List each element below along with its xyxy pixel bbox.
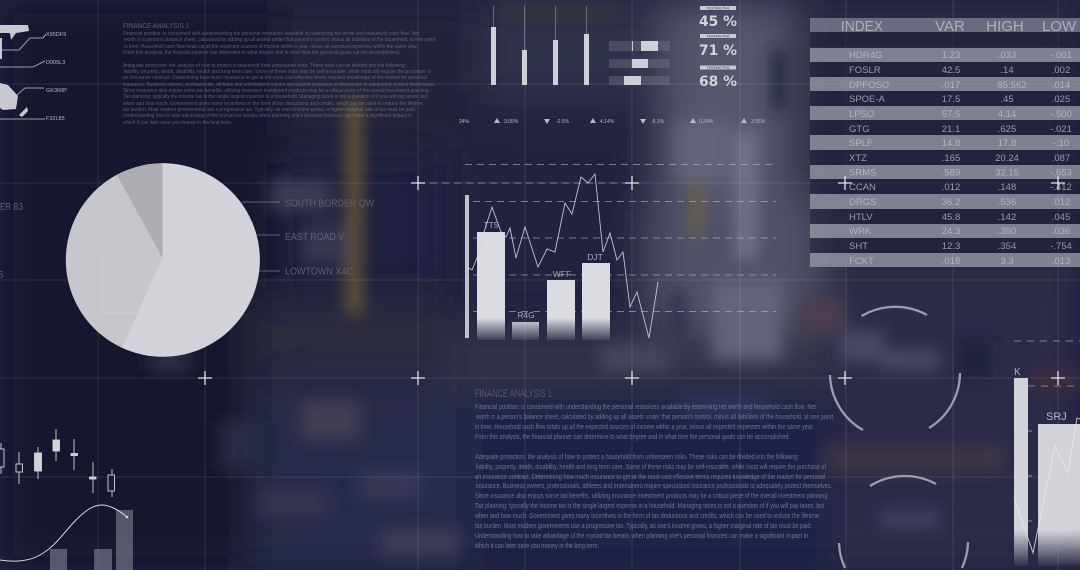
data table: -.10 bbox=[1053, 138, 1069, 149]
text block: finance analysis bottom: Financial position: is concerned with understanding the personal resources available by examining net worth and household cash flow. Net bbox=[475, 402, 817, 411]
percentage readouts: 45 % bbox=[699, 14, 737, 30]
text block: finance analysis bottom: in time. Household cash flow totals up all the expected sources of income within a year, minus all expected expenses within the same year. bbox=[475, 422, 814, 431]
pie legend: LOWTOWN X4C bbox=[285, 266, 353, 278]
data table: 45.8 bbox=[942, 212, 960, 223]
ticker row: -2.5% bbox=[556, 119, 570, 125]
data table: VAR bbox=[935, 18, 965, 35]
data table: .012 bbox=[942, 182, 960, 193]
text block: finance analysis top: liability, property, death, disability, health and long term care. Some of these risks may be self-insurable, while most will require the purchase of bbox=[124, 69, 432, 75]
text block: finance analysis bottom: From this analysis, the financial planner can determine to what degree and in what time the personal goals can be accomplished. bbox=[475, 432, 790, 441]
pie chart bbox=[66, 163, 260, 357]
data table: 1.23 bbox=[942, 50, 960, 61]
ticker row: 24% bbox=[459, 119, 470, 125]
text block: finance analysis top: Since insurance also enjoys some tax benefits, utilizing insurance investment products may be a critical piece of the overall investment planning. bbox=[123, 88, 430, 94]
right bar chart bbox=[1014, 341, 1080, 566]
text block: finance analysis bottom: Since insurance also enjoys some tax benefits, utilizing insurance investment products may be a critical piece of the overall investment planning. bbox=[475, 491, 829, 500]
data table: DRGS bbox=[849, 197, 876, 208]
pie legend: EAST ROAD V bbox=[285, 232, 344, 243]
pie legend bbox=[0, 198, 374, 281]
text block: finance analysis bottom: which it can later save you money in the long term. bbox=[474, 541, 599, 550]
right bar chart: K bbox=[1014, 367, 1021, 378]
text block: finance analysis top: tax burden. Most modern governments use a progressive tax. Typically, as one's income grows, a higher marginal rate of tax must be paid. bbox=[123, 107, 416, 113]
bar and line chart: WFF bbox=[553, 269, 571, 279]
ticker row: 3.05% bbox=[504, 119, 519, 125]
data table: 4.14 bbox=[998, 109, 1016, 120]
data table: -.500 bbox=[1050, 109, 1072, 120]
data table: WRK bbox=[849, 226, 872, 237]
right bar chart: SRJ bbox=[1046, 411, 1067, 423]
percentage readouts: 71 % bbox=[699, 43, 737, 59]
data table: .013 bbox=[1052, 256, 1070, 267]
data table: 57.5 bbox=[942, 109, 960, 120]
data table: 3.3 bbox=[1000, 256, 1014, 267]
data table: -.412 bbox=[1050, 182, 1072, 193]
text block: finance analysis top: Understanding how to take advantage of the myriad tax breaks when planning one's personal finances can make a significant impact in bbox=[123, 113, 412, 119]
percentage readouts bbox=[699, 6, 737, 90]
crosshair markers bbox=[198, 176, 1065, 385]
text block: finance analysis bottom: Understanding how to take advantage of the myriad tax breaks when planning one's personal finances can make a significant impact in bbox=[475, 531, 808, 540]
text block: finance analysis bottom: an insurance contract. Determining how much insurance to get at the most cost effective terms requires knowledge of the market for personal bbox=[475, 472, 825, 481]
data table: .014 bbox=[1052, 80, 1070, 91]
data table: 24.3 bbox=[942, 226, 960, 237]
text block: finance analysis bottom: liability, property, death, disability, health and long term care. Some of these risks may be self-insurable, while most will require the purchase of bbox=[476, 462, 827, 471]
data table: .012 bbox=[1052, 197, 1070, 208]
data table: -.754 bbox=[1050, 241, 1072, 252]
data table: SPOE-A bbox=[849, 94, 886, 105]
data table: .002 bbox=[1052, 65, 1070, 76]
data table: .017 bbox=[942, 80, 960, 91]
data table: 21.1 bbox=[942, 124, 960, 135]
data table: -.001 bbox=[1050, 50, 1072, 61]
data table: HDR4G bbox=[849, 50, 882, 61]
data table: .036 bbox=[1052, 226, 1070, 237]
data table: -.653 bbox=[1050, 168, 1072, 178]
ticker row: 0.24% bbox=[699, 119, 714, 125]
data table: DPFOSO bbox=[849, 80, 889, 91]
percentage readouts: TESTING PH3 bbox=[707, 66, 730, 70]
data table: GTG bbox=[849, 124, 870, 135]
data table: 17.8 bbox=[998, 138, 1016, 149]
pie legend: SOUTH BORDER QW bbox=[285, 198, 374, 210]
text block: finance analysis top: FINANCE ANALYSIS 1 bbox=[123, 21, 189, 30]
data table: LOW bbox=[1042, 18, 1077, 35]
data table: HIGH bbox=[986, 18, 1024, 35]
text block: finance analysis bottom: tax burden. Most modern governments use a progressive tax. Typically, as one's income grows, a higher marginal rate of tax must be paid. bbox=[475, 521, 812, 530]
data table: .025 bbox=[1052, 94, 1070, 105]
map with callouts: F32L85 bbox=[46, 116, 65, 122]
data table: 36.2 bbox=[942, 197, 960, 208]
circular gauge arcs top bbox=[830, 307, 960, 430]
data table: 17.5 bbox=[942, 94, 960, 105]
text block: finance analysis bottom bbox=[474, 388, 834, 550]
percentage readouts: 68 % bbox=[699, 74, 737, 90]
percentage readouts: TESTING PH2 bbox=[707, 34, 730, 38]
dashed reference lines bbox=[418, 164, 776, 312]
map with callouts: GK360P bbox=[46, 88, 67, 94]
bar and line chart bbox=[465, 174, 658, 340]
text block: finance analysis top bbox=[123, 21, 436, 126]
data table: SPLF bbox=[849, 138, 873, 149]
data table: .033 bbox=[998, 50, 1016, 61]
text block: finance analysis top: which it can later save you money in the long term. bbox=[123, 120, 232, 126]
circular gauge arcs bottom bbox=[839, 476, 968, 568]
text block: finance analysis top: Adequate protection: the analysis of how to protect a household from unforeseen risks. These risks can be divided into the following: bbox=[123, 63, 406, 69]
text block: finance analysis bottom: insurance. Business owners, professionals, athletes and entertainers require specialized insurance professionals to adequately protect themselves. bbox=[476, 481, 832, 490]
map with callouts bbox=[0, 25, 67, 122]
data table: SHT bbox=[849, 241, 868, 252]
data table: FOSLR bbox=[849, 65, 881, 76]
text block: finance analysis top: in time. Household cash flow totals up all the expected sources of income within a year, minus all expected expenses within the same year. bbox=[124, 44, 418, 50]
text block: finance analysis top: when and how much. Government gives many incentives in the form of tax deductions and credits, which can be used to reduce the lifetime bbox=[123, 101, 423, 107]
data table: SRMS bbox=[849, 168, 876, 178]
data table: .45 bbox=[1000, 94, 1014, 105]
bar and line chart: TT5 bbox=[483, 220, 499, 230]
ticker row: 3.05% bbox=[751, 119, 766, 125]
pie legend: ER B3 bbox=[0, 202, 23, 213]
text block: finance analysis top: From this analysis, the financial planner can determine to what degree and in what time the personal goals can be accomplished. bbox=[123, 50, 400, 56]
percentage readouts: TESTING PH1 bbox=[707, 6, 730, 10]
data table: .045 bbox=[1052, 212, 1070, 223]
data table: 20.24 bbox=[995, 153, 1019, 164]
map with callouts: X95DF9 bbox=[46, 32, 66, 38]
data table: .148 bbox=[998, 182, 1016, 193]
ticker row bbox=[459, 118, 766, 125]
data table: .142 bbox=[998, 212, 1016, 223]
text block: finance analysis bottom: Tax planning: typically the income tax is the single largest expense in a household. Managing taxes is not a question of if you will pay taxes, but bbox=[475, 501, 825, 510]
data table: 42.5 bbox=[942, 65, 960, 76]
vertical bar chart top bbox=[491, 6, 589, 85]
candlestick chart bbox=[0, 429, 114, 497]
curve and bars chart bbox=[0, 505, 133, 570]
data table: INDEX bbox=[841, 18, 883, 35]
data table: 85.562 bbox=[997, 80, 1027, 91]
data table: FCKT bbox=[849, 256, 874, 267]
text block: finance analysis top: Financial position: is concerned with understanding the personal resources available by examining net worth and household cash flow. Net bbox=[123, 31, 420, 37]
ticker row: -8.1% bbox=[651, 119, 665, 125]
data table: .589 bbox=[942, 168, 960, 178]
text block: finance analysis top: Tax planning: typically the income tax is the single largest expense in a household. Managing taxes is not a question of if you will pay taxes, but bbox=[123, 94, 428, 100]
data table: .018 bbox=[942, 256, 960, 267]
data table: 32.15 bbox=[995, 168, 1019, 178]
data table bbox=[810, 18, 1080, 267]
bar and line chart: R4G bbox=[517, 310, 535, 320]
text block: finance analysis bottom: Adequate protection: the analysis of how to protect a household from unforeseen risks. These risks can be divided into the following: bbox=[475, 452, 799, 461]
data table: HTLV bbox=[849, 212, 873, 223]
data table: 14.8 bbox=[942, 138, 960, 149]
text block: finance analysis top: worth is a person's balance sheet, calculated by adding up all assets under that person's control, minus all liabilities of the household, at one point bbox=[124, 37, 436, 43]
map with callouts: D005L3 bbox=[46, 60, 65, 66]
text block: finance analysis bottom: FINANCE ANALYSIS 1 bbox=[475, 388, 552, 400]
data table: LPSO bbox=[849, 109, 874, 120]
bar and line chart: DJT bbox=[587, 252, 603, 262]
data table: 12.3 bbox=[942, 241, 960, 252]
data table: .14 bbox=[1000, 65, 1014, 76]
horizontal range bars bbox=[609, 41, 670, 85]
text block: finance analysis bottom: when and how much. Government gives many incentives in the form of tax deductions and credits, which can be used to reduce the lifetime bbox=[474, 511, 819, 520]
data table: CCAN bbox=[849, 182, 876, 193]
text block: finance analysis top: an insurance contract. Determining how much insurance to get at the most cost effective terms requires knowledge of the market for personal bbox=[123, 75, 427, 81]
data table: .165 bbox=[942, 153, 960, 164]
data table: .625 bbox=[998, 124, 1016, 135]
data table: .390 bbox=[998, 226, 1016, 237]
data table: .087 bbox=[1052, 153, 1070, 164]
data table: XTZ bbox=[849, 153, 867, 164]
text block: finance analysis top: insurance. Business owners, professionals, athletes and entertainers require specialized insurance professionals to adequately protect themselves. bbox=[123, 82, 435, 88]
text block: finance analysis bottom: worth is a person's balance sheet, calculated by adding up all assets under that person's control, minus all liabilities of the household, at one point bbox=[475, 412, 834, 421]
data table: .354 bbox=[998, 241, 1016, 252]
data table: .536 bbox=[998, 197, 1016, 208]
data table: -.021 bbox=[1050, 124, 1072, 135]
ticker row: 4.14% bbox=[600, 119, 615, 125]
